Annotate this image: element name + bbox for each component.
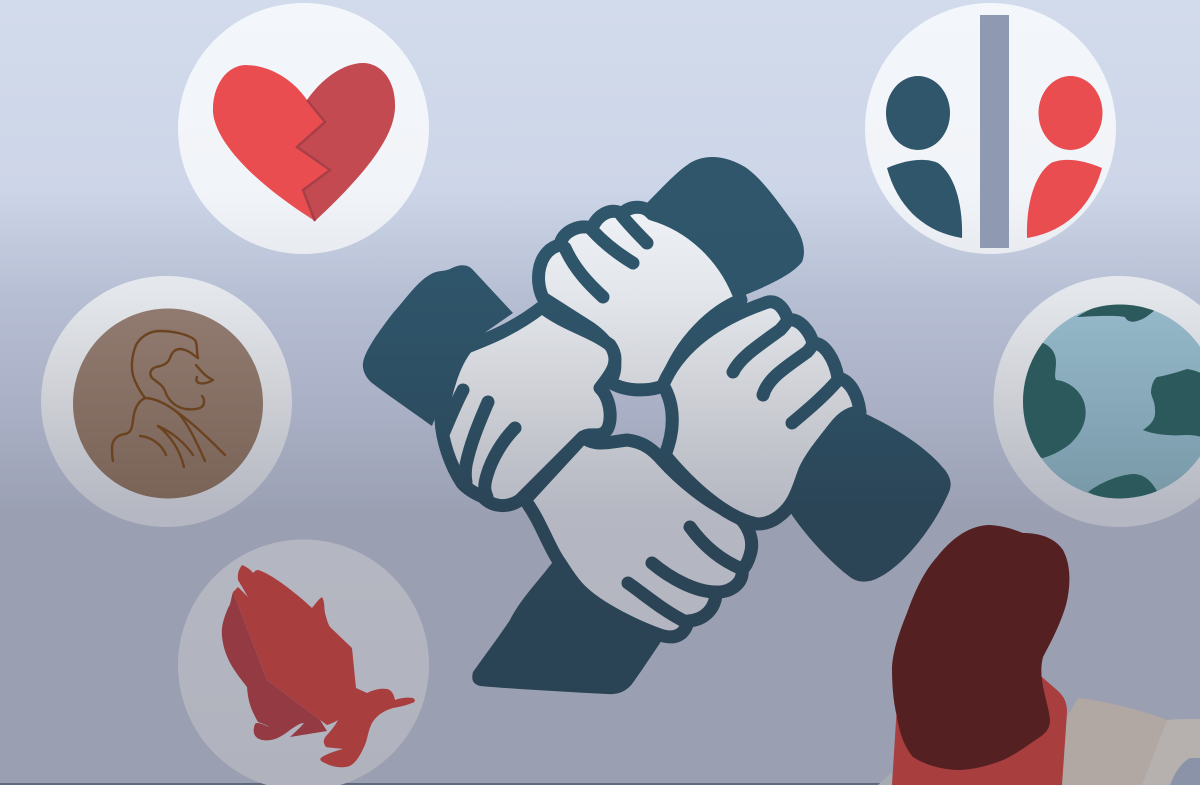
- arm: bottom: [472, 563, 662, 694]
- woman hair: [892, 525, 1069, 770]
- woman body: [892, 677, 1067, 785]
- book right page: [1142, 719, 1200, 785]
- finger lines: [444, 216, 838, 622]
- arm: right: [790, 412, 951, 582]
- icon: earth globe: [994, 276, 1200, 527]
- icon: praying hands: [178, 540, 429, 785]
- illustration: woman reading a book: [878, 525, 1200, 785]
- hand on book: [1170, 758, 1200, 785]
- unity hands: [363, 157, 951, 694]
- hand: right: [663, 302, 860, 524]
- hand: bottom: [525, 437, 752, 637]
- arm: left: [363, 265, 513, 426]
- book left page: [1062, 698, 1167, 785]
- icon: historic figure portrait: [41, 276, 292, 527]
- hand: top: [539, 207, 741, 390]
- arm: top right: [645, 157, 804, 295]
- hand: left: [441, 307, 615, 506]
- icon: two separated people: [865, 3, 1116, 254]
- bottom edge line: [0, 783, 880, 785]
- icon: broken heart: [178, 3, 429, 254]
- woman: jacket edge: [878, 772, 892, 785]
